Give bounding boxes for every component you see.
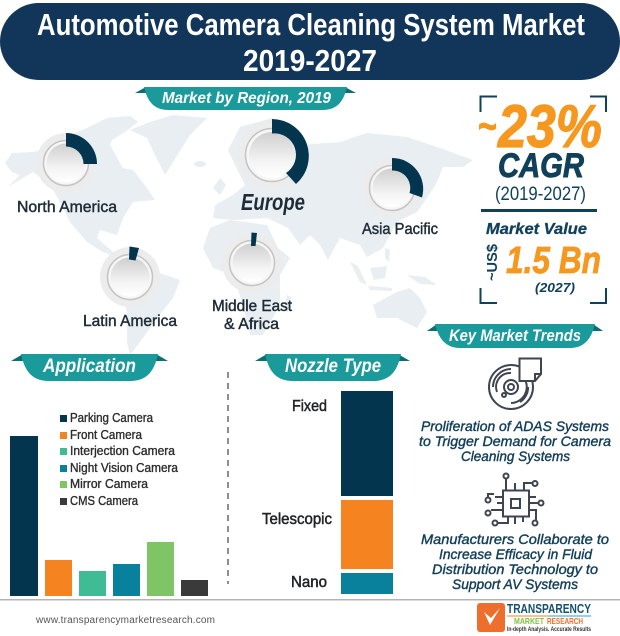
label: Asia Pacific: Asia Pacific xyxy=(362,221,438,238)
CAGR label: CAGR xyxy=(498,147,584,185)
labels: nozzle type: Telescopic xyxy=(262,511,332,528)
ribbon: application xyxy=(11,354,168,381)
legend: application: Interjection Camera xyxy=(70,444,175,458)
ribbon: nozzle type: Nozzle Type xyxy=(285,356,381,377)
trend text: ADAS: to Trigger Demand for Camera xyxy=(419,433,611,449)
legend: application: Mirror Camera xyxy=(70,477,148,491)
donut: Latin America xyxy=(100,246,160,307)
label: Middle East and Africa: & Africa xyxy=(224,316,279,333)
donut: Middle East and Africa xyxy=(222,232,282,293)
label: Latin America: Latin America xyxy=(83,313,177,330)
corner brackets xyxy=(480,96,606,303)
label: Europe: Europe xyxy=(241,189,305,215)
donut: North America xyxy=(36,133,97,193)
CAGR tilde: ~ xyxy=(478,102,497,151)
logo: In-depth Analysis. Accurate Results xyxy=(507,626,591,633)
logo: TRANSPARENCY xyxy=(507,601,591,616)
ribbon: key market trends xyxy=(427,324,603,348)
ribbon: market by region xyxy=(135,87,356,110)
world map background xyxy=(5,115,473,355)
label: Middle East and Africa: Middle East xyxy=(212,298,293,315)
labels: nozzle type: Fixed xyxy=(292,398,327,415)
trend text: manufacturers: Increase Efficacy in Fluid xyxy=(439,546,593,562)
logo xyxy=(477,601,591,633)
currency label: ~US$ xyxy=(484,243,501,281)
CAGR period: (2019-2027) xyxy=(495,184,586,205)
legend: application: CMS Camera xyxy=(70,494,138,508)
labels: nozzle type xyxy=(262,398,332,591)
logo: MARKET xyxy=(514,616,545,626)
legend: application xyxy=(60,411,178,508)
trend text: manufacturers: Distribution Technology to xyxy=(432,561,598,577)
trend text: ADAS: Proliferation of ADAS Systems xyxy=(421,418,609,434)
legend: application: Parking Camera xyxy=(70,411,153,425)
trend text: manufacturers: Support AV Systems xyxy=(452,576,578,592)
trend text: manufacturers xyxy=(421,531,609,592)
label: North America: North America xyxy=(17,199,117,216)
labels: nozzle type: Nano xyxy=(291,574,327,591)
market value heading: Market Value xyxy=(486,221,587,238)
legend: application: Night Vision Camera xyxy=(70,461,178,475)
ribbon: nozzle type xyxy=(255,354,410,381)
trend text: ADAS xyxy=(419,418,611,464)
icon: circuit chip xyxy=(486,474,544,526)
logo: RESEARCH xyxy=(547,616,583,626)
website url: www.transparencymarketresearch.com xyxy=(35,615,215,626)
trend text: manufacturers: Manufacturers Collaborate to xyxy=(421,531,609,547)
title banner: 2019-2027 xyxy=(243,43,377,78)
title banner xyxy=(0,3,620,80)
legend: application: Front Camera xyxy=(70,428,142,442)
icon: radar disc with paper xyxy=(489,358,541,409)
trend text: ADAS: Cleaning Systems xyxy=(461,448,570,464)
donut: Europe xyxy=(237,119,309,190)
donut: Asia Pacific xyxy=(362,158,423,218)
CAGR and market value panel xyxy=(478,93,606,303)
ribbon: application: Application xyxy=(42,356,136,377)
CAGR value: 23% xyxy=(497,93,602,160)
stacked bar: nozzle type xyxy=(341,391,393,594)
label: Middle East and Africa xyxy=(212,298,293,333)
market value figure: 1.5 Bn xyxy=(506,240,601,282)
bar chart: application xyxy=(10,436,208,596)
ribbon: key market trends: Key Market Trends xyxy=(449,326,581,345)
market value year: (2027) xyxy=(535,280,575,295)
ribbon: market by region: Market by Region, 2019 xyxy=(162,90,331,107)
